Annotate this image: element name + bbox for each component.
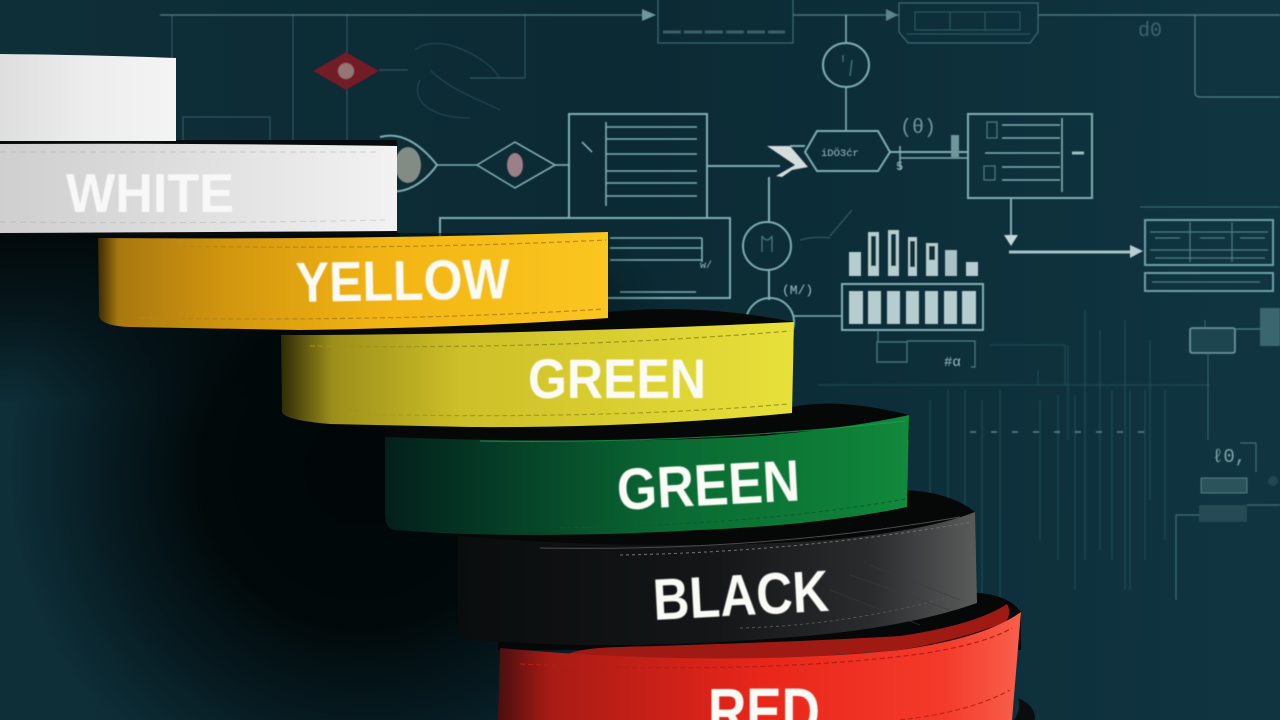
down arrow bbox=[1004, 198, 1018, 246]
connectors around chevron bbox=[707, 146, 805, 300]
belt: yellow bbox=[98, 232, 608, 330]
red belt interior bbox=[498, 593, 1021, 650]
lower small boxes bbox=[877, 330, 975, 371]
hexagon to box connector bbox=[890, 135, 968, 174]
bar panel bbox=[842, 284, 983, 330]
green belt interior bbox=[385, 404, 909, 440]
top right small label: d0 bbox=[1138, 20, 1162, 43]
top arrow bbox=[642, 9, 656, 21]
belt: black bbox=[458, 490, 977, 645]
belt: green bbox=[385, 404, 909, 535]
small label: (M/) bbox=[782, 283, 813, 298]
right bottom blocks bbox=[1176, 476, 1280, 600]
lime belt interior bbox=[281, 309, 794, 345]
red belt front bbox=[498, 612, 1021, 720]
hexagon to box connector: 5 bbox=[896, 160, 903, 174]
hexagon node: iDÖ3ćr bbox=[821, 147, 859, 160]
label: WHITE: WHITE bbox=[66, 162, 234, 224]
belt: red bbox=[498, 593, 1035, 720]
right side details bbox=[970, 308, 1280, 600]
red diamond bbox=[313, 52, 379, 90]
right table bbox=[1140, 207, 1280, 291]
top connector line bbox=[160, 14, 1280, 16]
chevron arrow bbox=[767, 146, 808, 177]
label: GREEN (dark): GREEN bbox=[615, 448, 801, 523]
right bottom small label bbox=[1212, 443, 1256, 472]
label: BLACK: BLACK bbox=[651, 559, 831, 633]
list box bbox=[569, 114, 707, 218]
top right bracket bbox=[1195, 15, 1280, 97]
belt: white upper bbox=[0, 54, 176, 141]
arrow to rounded panel bbox=[886, 9, 898, 21]
decision diamond bbox=[437, 142, 569, 188]
top left faint panel bbox=[172, 15, 525, 141]
bracket glyph: (θ) bbox=[900, 117, 936, 140]
faint hatch grid bbox=[818, 310, 1210, 600]
lower small boxes: #α bbox=[944, 355, 961, 371]
black belt interior bbox=[458, 490, 975, 545]
right list box bbox=[968, 114, 1092, 198]
lower coil edge bbox=[1014, 698, 1035, 720]
onion node bbox=[380, 136, 437, 191]
dashed data line bbox=[970, 431, 1145, 433]
hexagon node bbox=[805, 131, 890, 171]
lower list box bbox=[440, 218, 730, 298]
right bottom small label: ℓ0, bbox=[1212, 446, 1246, 468]
lower list box: w/ bbox=[700, 260, 712, 272]
right lower boxes bbox=[1190, 308, 1280, 440]
top circle node bbox=[823, 15, 869, 131]
node circle bbox=[743, 210, 852, 270]
lime belt front bbox=[281, 322, 794, 427]
leather scratches bbox=[830, 565, 960, 625]
box top centre bbox=[658, 0, 793, 43]
rounded top panel bbox=[899, 3, 1038, 43]
flowchart diagram backdrop bbox=[160, 0, 1280, 371]
horizontal arrow bbox=[1009, 245, 1143, 258]
belt: lime bbox=[281, 309, 794, 427]
label: GREEN (lime): GREEN bbox=[528, 347, 706, 410]
lower circle node bbox=[746, 298, 842, 346]
green belt front bbox=[385, 415, 909, 535]
red belt inner strip bbox=[562, 604, 1009, 665]
belt: white lower bbox=[0, 140, 397, 235]
bar chart bbox=[849, 230, 978, 276]
label: YELLOW: YELLOW bbox=[295, 247, 510, 315]
shadow behind belts bbox=[0, 233, 654, 720]
black belt front bbox=[458, 512, 977, 645]
